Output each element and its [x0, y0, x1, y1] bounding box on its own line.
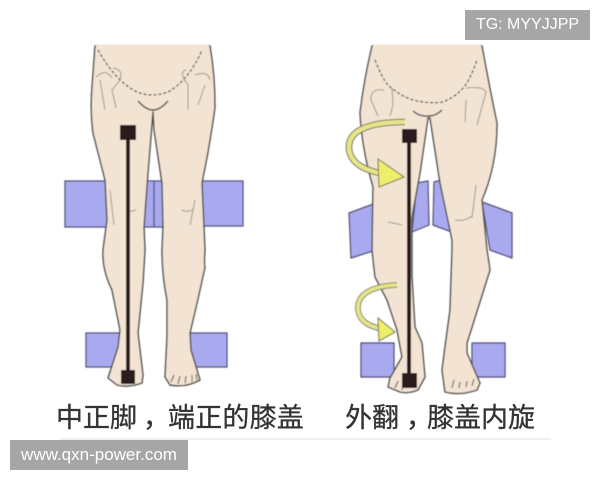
toes — [395, 379, 474, 390]
figure: everted foot with inward knee — [349, 44, 512, 394]
plumb line — [402, 129, 417, 388]
arrow: large curved yellow — [349, 122, 405, 187]
caption: right figure: 外翻 — [345, 403, 399, 433]
hip and knee details — [96, 68, 210, 225]
hip and knee details — [371, 88, 486, 225]
arrow: small curved yellow — [358, 285, 397, 341]
watermark: bottom left — [10, 440, 188, 470]
groin lines — [138, 101, 168, 110]
caption: left figure: 端正的膝盖 — [168, 403, 304, 433]
watermark: top right: TG: MYYJJPP — [476, 16, 579, 33]
caption: left figure — [56, 403, 304, 433]
legs — [91, 46, 215, 386]
caption divider — [60, 438, 551, 440]
caption: right figure: ， — [406, 403, 433, 433]
caption: right figure — [345, 403, 535, 433]
pelvis dashed outline — [98, 50, 202, 95]
tilted blocks — [349, 180, 512, 377]
pelvis dashed outline — [375, 60, 477, 103]
watermark: top right — [465, 10, 590, 40]
plumb line — [120, 125, 136, 384]
legs — [360, 46, 497, 394]
toes — [171, 374, 197, 384]
watermark: bottom left: www.qxn-power.com — [21, 445, 177, 464]
caption: left figure: ， — [143, 403, 170, 433]
groin lines — [413, 110, 442, 116]
figure: neutral foot with straight knee — [65, 44, 243, 386]
caption: right figure: 膝盖内旋 — [427, 403, 535, 433]
caption: left figure: 中正脚 — [56, 403, 137, 433]
blocks behind the knees — [65, 181, 243, 367]
